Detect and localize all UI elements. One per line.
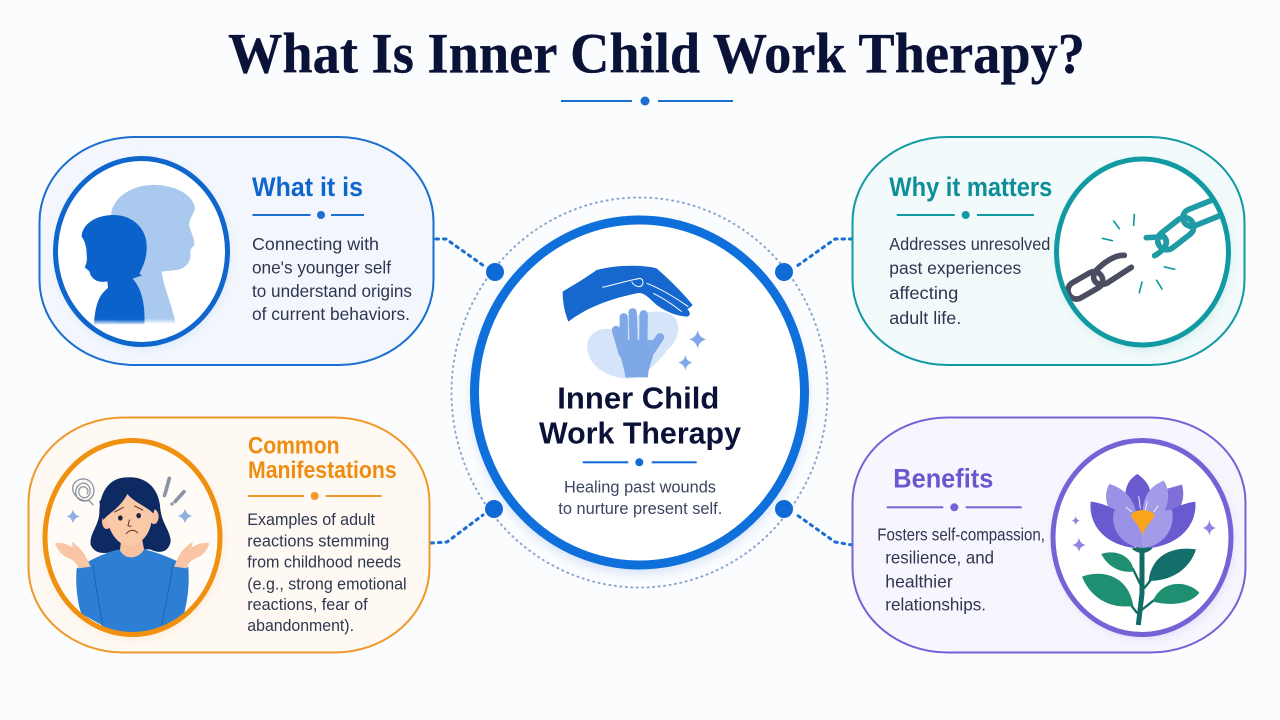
heading divider [248, 492, 382, 500]
central title [539, 380, 742, 450]
body text: Fosters self-compassion, [877, 525, 1045, 545]
panel: what it is [40, 137, 434, 365]
heading divider [897, 211, 1034, 219]
body text: of current behaviors. [252, 304, 410, 324]
body text: reactions, fear of [247, 595, 368, 614]
icon: flower [1053, 440, 1233, 638]
panel background [40, 137, 434, 365]
panel background [852, 418, 1246, 652]
body text: (e.g., strong emotional [247, 574, 407, 593]
central divider [583, 458, 697, 466]
heading: why it matters: Why it matters [889, 172, 1052, 202]
body text: abandonment). [247, 616, 354, 635]
circle ring [1056, 159, 1228, 345]
icon: broken chain [1056, 159, 1230, 349]
heading: common manifestations: Common [248, 432, 340, 460]
connector nodes [485, 263, 793, 518]
panel background [28, 418, 430, 652]
central ring [474, 220, 804, 565]
panel: why it matters [852, 137, 1244, 365]
body text: Examples of adult [247, 510, 375, 529]
heading: common manifestations [248, 432, 397, 484]
icon: protective hand over child's hand [563, 266, 706, 379]
body text [877, 525, 1045, 615]
body text [252, 234, 412, 324]
body text: adult life. [889, 308, 961, 328]
circle ring [45, 440, 220, 634]
panel background [852, 137, 1244, 365]
body text: from childhood needs [247, 553, 401, 572]
icon: adult and child silhouettes [56, 158, 229, 348]
body text: affecting [889, 283, 958, 303]
central title: Work Therapy [539, 415, 742, 450]
body text: Connecting with [252, 234, 379, 254]
central ring shadow [472, 224, 808, 574]
heading: what it is: What it is [252, 172, 363, 202]
central subtitle: to nurture present self. [558, 500, 722, 518]
icon: confused person [45, 440, 222, 638]
dotted outer ring [452, 198, 828, 588]
body text: past experiences [889, 258, 1022, 278]
body text: healthier [885, 571, 953, 591]
body text: to understand origins [252, 281, 412, 301]
panel: benefits [852, 418, 1246, 652]
central subtitle: Healing past wounds [564, 479, 716, 497]
panel: central circle [452, 198, 828, 588]
central title: Inner Child [557, 380, 719, 415]
panel: common manifestations [28, 418, 430, 652]
body text: reactions stemming [247, 532, 389, 551]
body text: one's younger self [252, 258, 391, 278]
connectors [431, 239, 852, 545]
body text: relationships. [885, 595, 986, 615]
central subtitle [558, 479, 722, 518]
heading: benefits: Benefits [893, 464, 993, 494]
heading: common manifestations: Manifestations [248, 457, 397, 484]
body text: resilience, and [885, 547, 994, 567]
title divider [561, 96, 733, 106]
body text: Addresses unresolved [889, 234, 1050, 254]
heading divider [252, 211, 364, 219]
title: What Is Inner Child Work Therapy? [228, 22, 1085, 86]
heading divider [887, 503, 1022, 511]
body text [889, 234, 1050, 328]
body text [247, 510, 407, 635]
